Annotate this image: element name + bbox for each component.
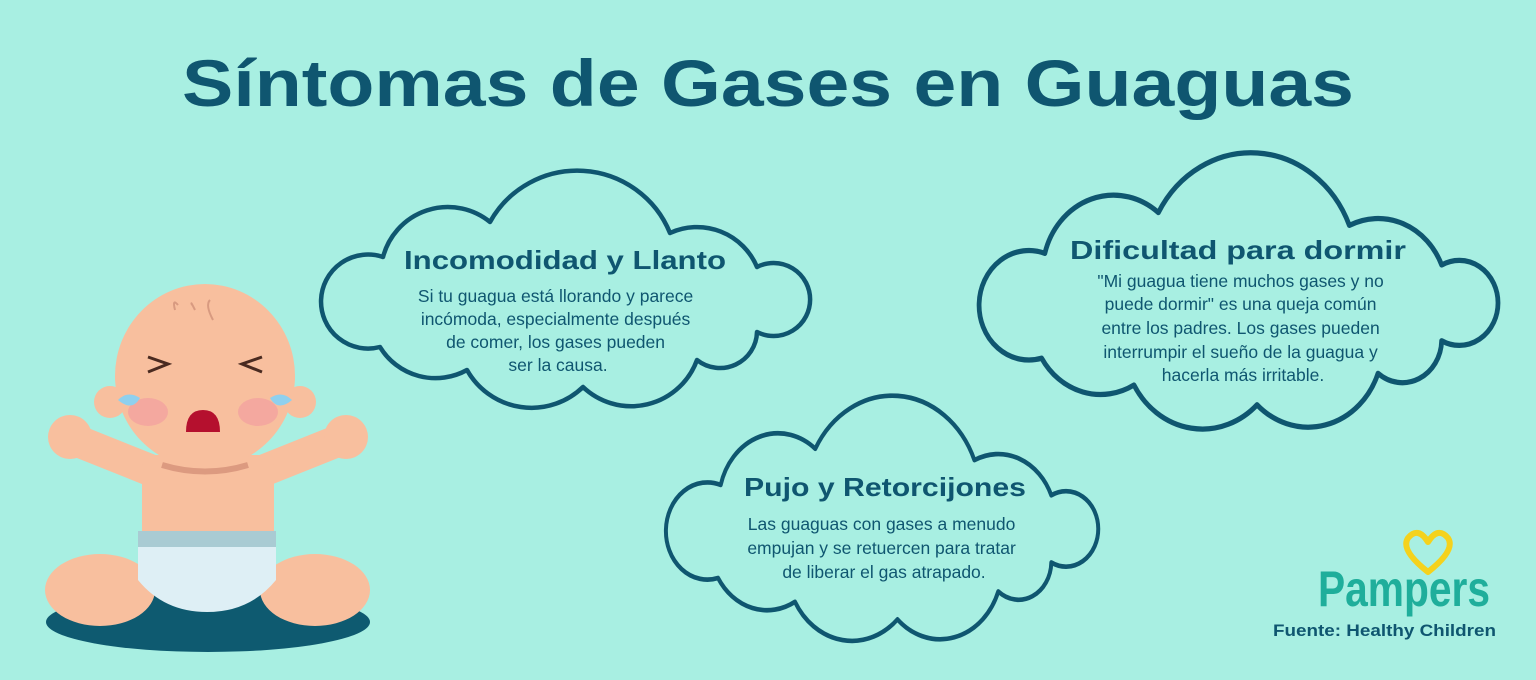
text block: "Mi guagua tiene muchos gases y no (1097, 271, 1384, 291)
panel: cloud 3 Pujo y Retorcijones (666, 396, 1098, 641)
text block: hacerla más irritable. (1162, 365, 1324, 385)
logo: Pampers (1318, 533, 1490, 617)
text block: de comer, los gases pueden (446, 332, 665, 352)
icon: heart (1406, 533, 1450, 572)
text block: Si tu guagua está llorando y parece (418, 286, 693, 306)
icon: crying baby (45, 284, 370, 652)
logo: Pampers: Pampers (1318, 561, 1490, 617)
panel: cloud 1 Incomodidad y Llanto (321, 171, 810, 408)
text block: interrumpir el sueño de la guagua y (1103, 342, 1378, 362)
text block: Las guaguas con gases a menudo (748, 514, 1015, 534)
text block: ser la causa. (508, 355, 608, 375)
text block: entre los padres. Los gases pueden (1101, 318, 1380, 338)
heading: Incomodidad y Llanto: Incomodidad y Llanto (404, 245, 726, 275)
heading: Pujo y Retorcijones: Pujo y Retorcijones (744, 472, 1026, 502)
source text: Fuente: Healthy Children (1273, 621, 1496, 640)
title: Síntomas de Gases en Guaguas (182, 46, 1354, 120)
heading: Dificultad para dormir: Dificultad para dormir (1070, 235, 1406, 265)
text block: incómoda, especialmente después (421, 309, 691, 329)
text block: puede dormir" es una queja común (1105, 294, 1376, 314)
text block: empujan y se retuercen para tratar (747, 538, 1016, 558)
panel: cloud 2 Dificultad para dormir (979, 153, 1498, 429)
text block: de liberar el gas atrapado. (782, 562, 986, 582)
